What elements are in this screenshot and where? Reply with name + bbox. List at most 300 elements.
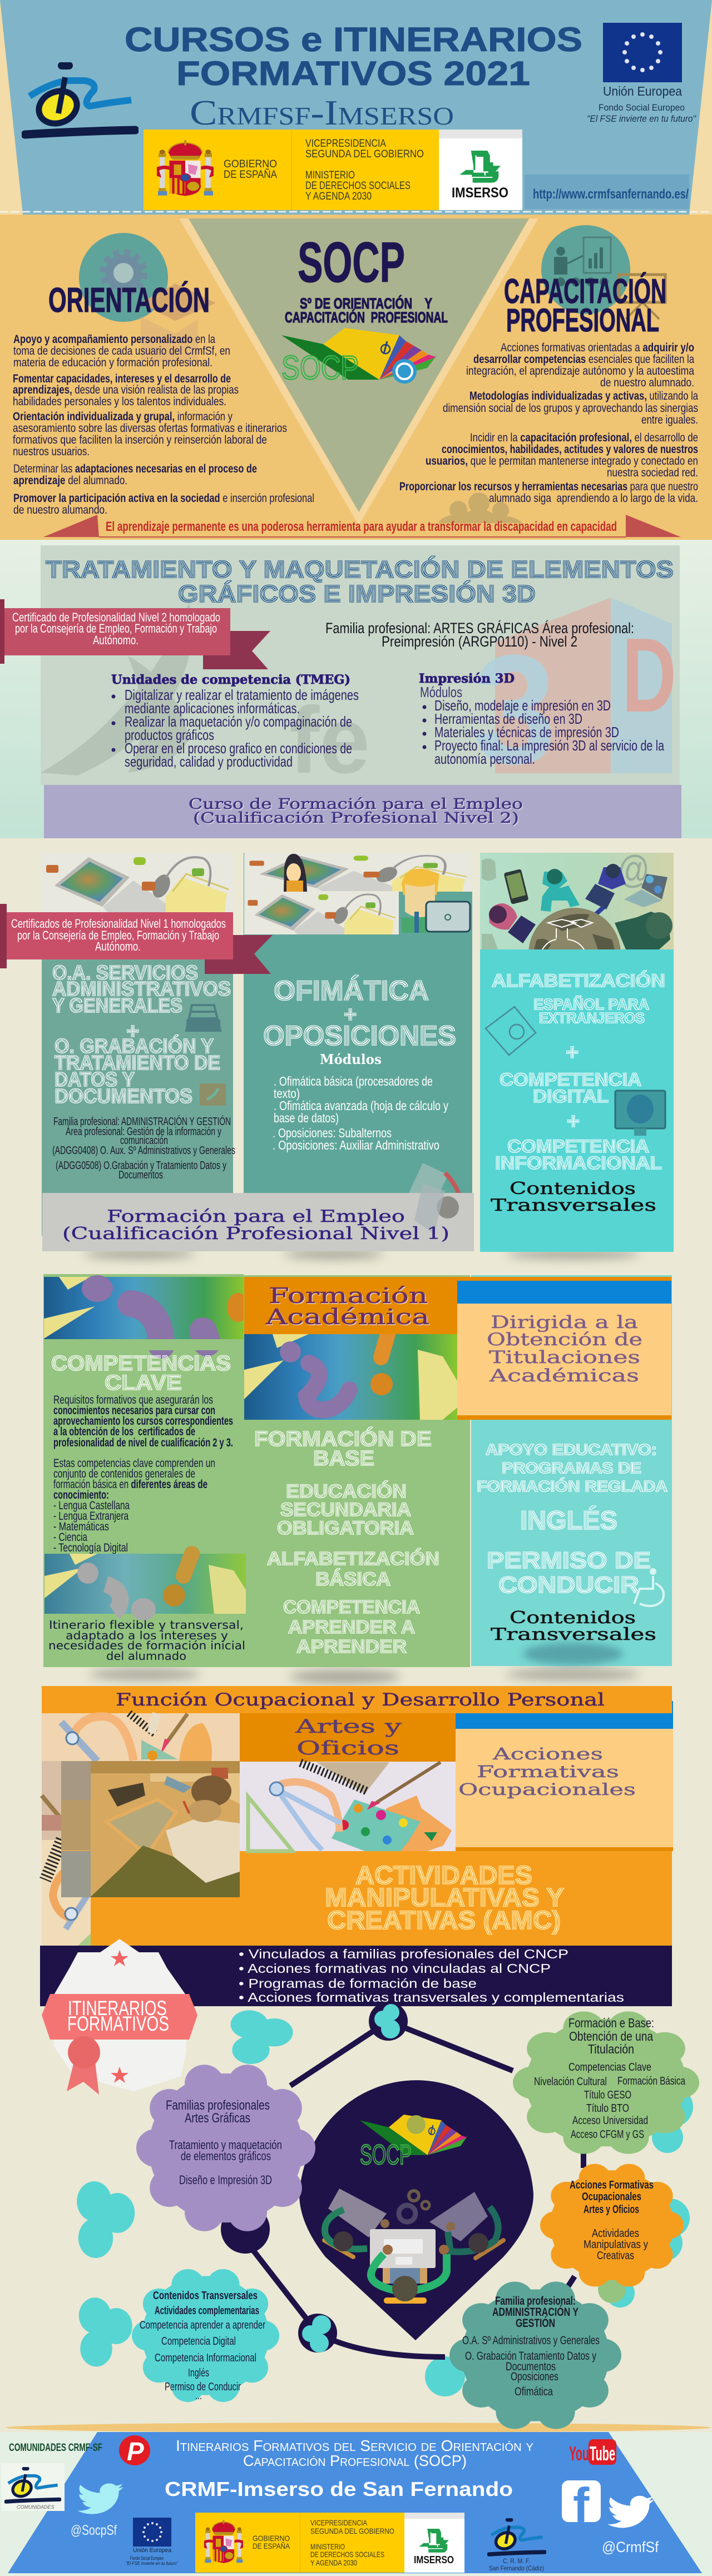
- heading: administrativos: DATOS Y: [55, 1068, 135, 1091]
- text: familia administración: Área profesional: Gestión de la información y: [66, 1125, 221, 1138]
- blob: familia administración: GESTIÓN: [516, 2316, 555, 2330]
- heading: alfabetización: COMPETENCIA: [500, 1070, 641, 1090]
- website link: [525, 175, 689, 209]
- badge: itinerarios formativos: [42, 1939, 197, 2095]
- icon: youtube: You: [569, 2442, 589, 2465]
- text: contenidos transversales: Transversales: [491, 1625, 656, 1644]
- text: familia profesional: Familia profesional: ARTES GRÁFICAS Área profesional:: [325, 620, 634, 636]
- government band small: VICEPRESIDENCIA: [310, 2518, 368, 2527]
- EU flag: "El FSE invierte en tu futuro": [587, 113, 696, 124]
- footer: [0, 2282, 712, 2576]
- text: unidades de competencia: [111, 673, 359, 770]
- government band small: [195, 2513, 464, 2573]
- heading: apoyo educativo: PROGRAMAS DE: [502, 1459, 641, 1476]
- heading: formación de base: BASE: [313, 1447, 374, 1470]
- blob: familia administración: [449, 2282, 621, 2429]
- icon: gear circle: [79, 233, 216, 361]
- government band: DE ESPAÑA: [224, 168, 277, 181]
- heading: formación de base: OBLIGATORIA: [277, 1518, 414, 1539]
- watermark: people: [438, 493, 522, 523]
- panel: itinerarios diagram: [42, 1939, 699, 2402]
- EU flag: [587, 23, 696, 124]
- government band small: SEGUNDA DEL GOBIERNO: [310, 2527, 394, 2535]
- blob: contenidos transversales: Contenidos Transversales: [153, 2290, 258, 2302]
- ribbon: certificado nivel 2: Certificado de Profesionalidad Nivel 2 homologado: [12, 610, 220, 624]
- text: orientación: [13, 333, 314, 516]
- heading bar: [42, 1686, 673, 1714]
- icon: facebook: [562, 2478, 601, 2533]
- ribbon: certificados nivel 1: por la Consejería de Empleo, Formación y Trabajo: [17, 928, 219, 942]
- heading: SOCP: Sº DE ORIENTACIÓN Y: [300, 295, 432, 312]
- student green: [615, 912, 670, 949]
- text: impresión 3D: Módulos: [420, 684, 462, 700]
- icon: book: [486, 1007, 536, 1055]
- illustration: globe and students: [480, 848, 674, 1005]
- text: @SocpSf: @SocpSf: [71, 2523, 117, 2538]
- heading: alfabetización: +: [567, 1109, 580, 1133]
- icon: wheelchair: [634, 1569, 664, 1606]
- logo: comunidades: [1, 2463, 65, 2511]
- illustration: woman: [284, 854, 307, 892]
- text: contenidos transversales: Contenidos: [510, 1179, 636, 1199]
- text: unidades de competencia: Digitalizar y realizar el tratamiento de imágenes: [125, 687, 359, 703]
- text: itinerario flexible: Itinerario flexible y transversal,: [49, 1618, 244, 1632]
- blob: contenidos transversales: [132, 2269, 279, 2402]
- text: orientación: formativos que faciliten la inserción y reinserción laboral de: [13, 434, 267, 446]
- shadows: section 3: [83, 1249, 640, 1259]
- EU flag small: Unión Europea: [133, 2547, 172, 2554]
- text: itinerario flexible: necesidades de formación inicial: [48, 1639, 245, 1652]
- heading: apoyo educativo: PERMISO DE: [487, 1547, 651, 1573]
- blob: acciones ocupacionales: Creativas: [597, 2250, 634, 2262]
- panel: lista de acciones: • Programas de formación de base: [239, 1976, 477, 1991]
- icon: drawer: [186, 1005, 220, 1031]
- text: contenidos transversales: Contenidos: [510, 1608, 636, 1628]
- text: competencias clave: - Matemáticas: [53, 1520, 109, 1533]
- footer heading: [176, 2437, 533, 2469]
- illustration: three workers: [324, 2189, 503, 2304]
- heading: formación de base: SECUNDARIA: [280, 1499, 411, 1520]
- text: competencias clave: aprovechamiento los cursos correspondientes: [53, 1415, 233, 1428]
- text: capacitación: Acciones formativas orientadas a adquirir y/o: [501, 341, 694, 354]
- blob: contenidos transversales: Competencia Informacional: [155, 2352, 256, 2364]
- image: shapes muted: [44, 1554, 246, 1620]
- heading: dirigida a la obtención: Titulaciones: [489, 1347, 640, 1367]
- ribbon: certificados nivel 1: [0, 904, 273, 974]
- column: apoyo educativo: [457, 1275, 672, 1666]
- text: contenidos transversales: Transversales: [491, 1196, 656, 1215]
- text: unidades de competencia: Unidades de competencia (TMEG): [111, 673, 350, 687]
- image: drawing tools, left: [32, 1713, 241, 1946]
- blob: acciones ocupacionales: Actividades: [592, 2227, 639, 2240]
- panel: lista de acciones: • Acciones formativas transversales y complementarias: [239, 1990, 624, 2005]
- logo: CRMF small: C. R. M. F.: [503, 2557, 530, 2565]
- text: familia administración: Familia profesional: ADMINISTRACIÓN Y GESTIÓN: [53, 1115, 231, 1128]
- blob: formación de base: Acceso CFGM y GS: [571, 2129, 644, 2141]
- banner: formación para el empleo: [42, 1184, 474, 1251]
- heading: ofimática: Módulos: [320, 1051, 382, 1067]
- text: orientación: Promover la participación activa en la sociedad e inserción profesional: [13, 492, 314, 505]
- text: competencias clave: formación básica en diferentes áreas de: [53, 1478, 207, 1491]
- government band: DE DERECHOS SOCIALES: [305, 180, 411, 192]
- blob: contenidos transversales: ...: [195, 2390, 202, 2402]
- text: capacitación: Proporcionar los recursos y herramientas necesarias para que nuestro: [399, 480, 698, 493]
- heading: dirigida a la obtención: [487, 1312, 642, 1386]
- heading: formación de base: ALFABETIZACIÓN: [267, 1548, 439, 1569]
- text: competencias clave: a la obtención de los certificados de: [53, 1425, 195, 1438]
- heading: alfabetización: +: [566, 1040, 578, 1065]
- blob: formación de base: Formación Básica: [617, 2075, 686, 2087]
- blob: artes gráficas: Familias profesionales: [166, 2098, 270, 2113]
- ribbon: certificado nivel 2: Autónomo.: [93, 633, 139, 647]
- heading: competencias clave: CLAVE: [105, 1371, 182, 1395]
- panel: SOCP intro: [0, 215, 712, 540]
- banner: formación para el empleo: Formación para el Empleo: [107, 1207, 405, 1226]
- government band: [144, 130, 522, 210]
- heading: alfabetización: INFORMACIONAL: [495, 1153, 662, 1173]
- connector lines: [245, 2021, 584, 2357]
- heading: competencias clave: [51, 1352, 231, 1395]
- heading: alfabetización: [492, 971, 665, 1173]
- blob: formación de base: Nivelación Cultural: [534, 2076, 607, 2088]
- text: unidades de competencia: Operar en el proceso grafico en condiciones de: [125, 740, 352, 757]
- icon: youtube: [569, 2439, 616, 2465]
- text: módulos ofimática: . Oposiciones: Auxiliar Administrativo: [273, 1138, 439, 1152]
- panel: función ocupacional: [32, 1686, 673, 2006]
- text: módulos ofimática: base de datos): [274, 1111, 339, 1125]
- blob: formación de base: Competencias Clave: [568, 2061, 651, 2073]
- text: orientación: de nuestro alumando.: [13, 504, 107, 516]
- icon: facebook: f: [573, 2478, 590, 2533]
- blob: acciones ocupacionales: Acciones Formativas: [570, 2179, 654, 2191]
- blob: acciones ocupacionales: Ocupacionales: [582, 2191, 641, 2203]
- heading: alfabetización: ESPAÑOL PARA: [533, 996, 649, 1013]
- watermark: floral Life: fe: [289, 688, 370, 793]
- text: módulos ofimática: texto): [274, 1086, 300, 1101]
- laptop: [641, 874, 668, 899]
- text: contenidos transversales: [491, 1179, 656, 1215]
- text: módulos ofimática: . Ofimática básica (procesadores de: [274, 1074, 433, 1088]
- blob: artes gráficas: Artes Gráficas: [185, 2111, 250, 2126]
- heading: course title: [46, 555, 674, 608]
- panel: tratamiento y maquetación: [0, 540, 712, 838]
- logo: SOCP book: [281, 328, 438, 386]
- government band: GOBIERNO: [224, 158, 277, 170]
- image: photo of student: [61, 1761, 240, 1897]
- icon: twitter SOCP: [77, 2483, 123, 2514]
- panel: lista de acciones: • Acciones formativas no vinculadas al CNCP: [239, 1961, 551, 1976]
- text: competencias clave: - Ciencia: [53, 1531, 87, 1544]
- panel: acciones formativas ocupacionales: Acciones: [492, 1744, 603, 1763]
- heading: administrativos: O. GRABACIÓN Y: [55, 1034, 214, 1057]
- text: unidades de competencia: mediante aplicaciones informáticas.: [125, 700, 300, 717]
- footer heading: Itinerarios Formativos del Servicio de Orientación y: [176, 2437, 533, 2454]
- watermark: 3D box: D: [622, 616, 676, 734]
- panel: acciones formativas ocupacionales: Formativas: [477, 1762, 619, 1781]
- heading: alfabetización: EXTRANJEROS: [539, 1009, 645, 1026]
- node: bottom: [298, 2314, 337, 2353]
- government band: IMSERSO: [452, 185, 508, 201]
- heading: competencias clave: COMPETENCIAS: [51, 1352, 231, 1375]
- title: FORMATIVOS 2021: [176, 54, 530, 92]
- heading: administrativos: TRATAMIENTO DE: [55, 1051, 220, 1074]
- heading: ofimática: OPOSICIONES: [263, 1020, 456, 1051]
- phone: [503, 869, 529, 904]
- column: competencias clave: [43, 1274, 249, 1667]
- heading: capacitación profesional: [504, 272, 666, 339]
- text: capacitación: Incidir en la capacitación profesional, el desarrollo de: [470, 431, 698, 444]
- government band: VICEPRESIDENCIA: [305, 138, 386, 150]
- blob: familia administración: ADMINISTRACIÓN Y: [492, 2305, 578, 2319]
- text: familia administración: comunicación: [120, 1135, 168, 1147]
- blob: familia administración: Familia profesional:: [495, 2295, 576, 2308]
- logo: CRMF: [25, 66, 135, 135]
- text: módulos ofimática: . Oposiciones: Subalternos: [273, 1126, 392, 1140]
- text: orientación: toma de decisiones de cada usuario del CrmfSf, en: [13, 345, 230, 357]
- text: competencias clave: - Lengua Castellana: [53, 1499, 130, 1512]
- government band: MINISTERIO: [305, 170, 355, 181]
- icon: phone: [200, 1083, 226, 1106]
- text: impresión 3D: autonomía personal.: [434, 750, 535, 767]
- ribbon: certificados nivel 1: Autónomo.: [95, 939, 141, 953]
- heading: administrativos: DOCUMENTOS: [55, 1085, 192, 1107]
- text: familia administración: (ADGG0408) O. Aux. Sº Administrativos y Generales: [52, 1145, 235, 1157]
- text: competencias clave: Estas competencias clave comprenden un: [53, 1457, 215, 1470]
- text: orientación: asesoramiento sobre las diversas ofertas formativas e itinerarios: [13, 422, 287, 435]
- blob: artes gráficas: de elementos gráficos: [181, 2149, 271, 2163]
- heading: apoyo educativo: APOYO EDUCATIVO:: [486, 1441, 657, 1458]
- text: capacitación: entre iguales.: [641, 414, 698, 426]
- text: impresión 3D: Herramientas de diseño en 3D: [434, 710, 582, 727]
- watermark: 3D box: 3: [473, 623, 556, 797]
- text: itinerario flexible: del alumnado: [106, 1649, 186, 1663]
- text: capacitación: Metodologías individualizadas y activas, utilizando la: [469, 390, 698, 402]
- blob: familia administración: Documentos: [506, 2360, 556, 2373]
- heading: orientación: ORIENTACIÓN: [48, 281, 210, 320]
- blob: contenidos transversales: Actividades complementarias: [155, 2305, 259, 2317]
- text: módulos ofimática: [273, 1074, 448, 1152]
- heading: ofimática: +: [344, 1002, 357, 1027]
- text: competencias clave: Requisitos formativos que asegurarán los: [53, 1394, 213, 1406]
- heading: course title: TRATAMIENTO Y MAQUETACIÓN DE ELEMENTOS: [46, 555, 674, 583]
- EU flag small: Fondo Social Europeo: [130, 2555, 164, 2561]
- heading bar: Función Ocupacional y Desarrollo Personal: [116, 1690, 605, 1710]
- blob: familia administración: Ofimática: [515, 2385, 553, 2398]
- icon: pinterest: [119, 2435, 150, 2466]
- blob: familia administración: O. Grabación Tratamiento Datos y: [465, 2350, 596, 2363]
- background orange block: [91, 1851, 672, 1946]
- heading: formación de base: COMPETENCIA: [283, 1597, 420, 1617]
- text: orientación: Fomentar capacidades, intereses y el desarrollo de: [13, 372, 231, 385]
- blue trapezoid: [8, 2432, 702, 2573]
- text: capacitación: [399, 341, 698, 505]
- heading: alfabetización: ALFABETIZACIÓN: [492, 971, 665, 991]
- panel: formación para el empleo: [0, 848, 674, 1252]
- logo: CRMF small: San Fernando (Cádiz): [489, 2564, 544, 2572]
- text: unidades de competencia: productos gráficos: [125, 727, 214, 743]
- ribbon: certificados nivel 1: Certificados de Profesionalidad Nivel 1 homologados: [11, 917, 226, 931]
- subtitle: Crmfsf-Imserso: [190, 93, 454, 132]
- blob: formación de base: Formación e Base:: [568, 2016, 654, 2030]
- heading: formación académica: Formación: [269, 1284, 428, 1308]
- text: familia administración: [52, 1115, 235, 1181]
- EU flag small: "El FSE invierte en tu futuro": [126, 2561, 179, 2566]
- logo: SOCP book: SOCP: [281, 349, 359, 386]
- text: impresión 3D: [419, 672, 664, 767]
- icon: twitter CRMF: [607, 2496, 654, 2528]
- heading: AMC: [325, 1861, 564, 1935]
- teal clusters: [77, 2010, 693, 2396]
- heading: alfabetización: DIGITAL: [533, 1086, 609, 1106]
- text: impresión 3D: Diseño, modelaje e impresión en 3D: [434, 697, 611, 714]
- heading: formación de base: EDUCACIÓN: [286, 1481, 407, 1502]
- banner: formación para el empleo: (Cualificación Profesional Nivel 1): [62, 1224, 449, 1244]
- blob: artes gráficas: [136, 2065, 315, 2231]
- text: orientación: aprendizaje del alumnado.: [13, 474, 127, 487]
- heading: administrativos: +: [126, 1019, 139, 1043]
- blob: artes gráficas: Tratamiento y maquetación: [169, 2138, 282, 2152]
- text: orientación: aprendizajes, desde una visión realista de las propias: [13, 384, 239, 396]
- panel: lista de acciones: • Vinculados a familias profesionales del CNCP: [239, 1947, 568, 1961]
- heading: apoyo educativo: [477, 1441, 668, 1598]
- text: orientación: nuestros usuarios.: [13, 445, 90, 458]
- ribbon: certificado nivel 2: por la Consejería de Empleo, Formación y Trabajo: [15, 621, 217, 635]
- heading: formación académica: Académica: [265, 1305, 429, 1329]
- government band small: GOBIERNO: [253, 2534, 290, 2543]
- heading: administrativos: [52, 961, 231, 1107]
- government band: Y AGENDA 2030: [305, 191, 372, 202]
- student teal: [541, 885, 580, 912]
- icon: pinterest: P: [127, 2437, 144, 2466]
- blob: contenidos transversales: Inglés: [188, 2367, 209, 2379]
- text: competencias clave: - Tecnología Digital: [53, 1541, 128, 1554]
- text: orientación: Orientación individualizada y grupal, información y: [13, 410, 233, 423]
- logo: SOCP book in pin: [360, 2115, 468, 2170]
- heading: formación académica: [265, 1284, 429, 1329]
- student pink with tablet: [508, 916, 536, 943]
- heading: administrativos: ADMINISTRATIVOS: [52, 977, 231, 1000]
- government band small: DE DERECHOS SOCIALES: [310, 2550, 384, 2559]
- text: competencias clave: conjunto de contenidos generales de: [53, 1468, 195, 1480]
- blob: acciones ocupacionales: Artes y Oficios: [584, 2204, 639, 2216]
- heading: artes y oficios: Oficios: [296, 1737, 399, 1759]
- blob: formación de base: Título GESO: [584, 2089, 631, 2101]
- illustration: worker from above: [409, 1163, 461, 1223]
- text: capacitación: de nuestro alumnado.: [600, 376, 694, 389]
- heading: CRMF: CRMF-Imserso de San Fernando: [165, 2478, 513, 2500]
- heading: AMC: CREATIVAS (AMC): [327, 1906, 561, 1935]
- text: orientación: Determinar las adaptaciones necesarias en el proceso de: [13, 463, 257, 475]
- column: ofimática: [244, 853, 472, 1194]
- heading: AMC: ACTIVIDADES: [355, 1861, 532, 1889]
- text: impresión 3D: Impresión 3D: [419, 672, 515, 686]
- logo: SOCP book in pin: SOCP: [360, 2139, 412, 2170]
- text: itinerario flexible: adaptado a los intereses y: [66, 1629, 228, 1642]
- blob: formación de base: Titulación: [588, 2042, 634, 2056]
- text: competencias clave: profesionalidad de nivel de cualificación 2 y 3.: [53, 1436, 233, 1449]
- heading: administrativos: O.A. SERVICIOS: [52, 961, 198, 984]
- text: @CrmfSf: @CrmfSf: [602, 2539, 659, 2555]
- heading: artes y oficios: Artes y: [294, 1715, 402, 1738]
- government band small: DE ESPAÑA: [253, 2542, 290, 2550]
- heading: alfabetización: COMPETENCIA: [507, 1136, 649, 1156]
- text: unidades de competencia: Realizar la maquetación y/o compaginación de: [125, 713, 352, 730]
- watermark: floral Life: [41, 603, 370, 793]
- logo: comunidades: COMUNIDADES: [17, 2504, 55, 2510]
- EU flag: Fondo Social Europeo: [599, 102, 685, 113]
- text: familia administración: Documentos: [118, 1169, 163, 1181]
- heading: formación de base: APRENDER: [296, 1636, 407, 1657]
- heading: formación de base: APRENDER A: [288, 1617, 415, 1637]
- logo: CRMF small: [489, 2520, 545, 2572]
- blob: contenidos transversales: Permiso de Conducir: [165, 2381, 241, 2393]
- heading: ofimática: [263, 975, 456, 1067]
- icon: monitor: [615, 1091, 665, 1136]
- shadows: section 4: [89, 1669, 640, 1683]
- heading: dirigida a la obtención: Dirigida a la: [491, 1312, 638, 1332]
- blob: formación de base: Título BTO: [586, 2102, 629, 2115]
- blob: acciones ocupacionales: [540, 2164, 684, 2286]
- footer heading: Capacitación Profesional (SOCP): [243, 2452, 467, 2469]
- column: transversales: [480, 848, 674, 1252]
- image: shapes top: [44, 1275, 249, 1350]
- blob: contenidos transversales: Competencia aprender a aprender: [140, 2319, 265, 2331]
- heading: ofimática: OFIMÁTICA: [274, 975, 429, 1006]
- panel: lista de acciones: [40, 1946, 672, 2006]
- government band small: Y AGENDA 2030: [310, 2558, 357, 2567]
- heading: course title: GRÁFICOS E IMPRESIÓN 3D: [178, 580, 536, 608]
- header band: [0, 0, 712, 218]
- text: impresión 3D: Materiales y técnicas de impresión 3D: [434, 724, 619, 740]
- illustration: man with laptop: [402, 869, 470, 933]
- blob: contenidos transversales: Competencia Digital: [161, 2335, 236, 2348]
- blob: familia administración: O.A. Sº Administrativos y Generales: [462, 2334, 600, 2347]
- text: contenidos transversales: [491, 1608, 656, 1644]
- text: competencias clave: conocimiento:: [53, 1489, 109, 1501]
- badge: itinerarios formativos: ITINERARIOS: [68, 1997, 167, 2020]
- blob: formación de base: Obtención de una: [569, 2029, 653, 2043]
- text: orientación: habilidades personales y los talentos individuales.: [13, 395, 226, 408]
- panel: acciones formativas ocupacionales: Ocupacionales: [458, 1780, 636, 1799]
- government band small: MINISTERIO: [310, 2542, 345, 2551]
- illustration: globe and students: @: [617, 848, 650, 891]
- heading: apoyo educativo: CONDUCIR: [498, 1572, 639, 1598]
- blob: formación de base: Acceso Universidad: [572, 2115, 648, 2127]
- banner: curso formación empleo: (Cualificación Profesional Nivel 2): [193, 810, 519, 827]
- heading: SOCP: [285, 231, 448, 326]
- government band: SEGUNDA DEL GOBIERNO: [305, 148, 424, 160]
- ribbon: certificado nivel 2: [0, 599, 270, 669]
- title: [125, 21, 582, 92]
- heading: formación de base: BÁSICA: [315, 1569, 390, 1590]
- location pin: [299, 2080, 533, 2340]
- icon: presenter circle: [541, 225, 665, 319]
- text: familia profesional: Preimpresión (ARGP0110) - Nivel 2: [382, 633, 577, 650]
- title: CURSOS e ITINERARIOS: [125, 21, 582, 58]
- heading: SOCP: SOCP: [298, 231, 405, 294]
- text: unidades de competencia: seguridad, calidad y productividad: [125, 753, 293, 770]
- heading: SOCP: CAPACITACIÓN PROFESIONAL: [285, 309, 448, 326]
- globe: [528, 908, 621, 1000]
- heading: formación de base: [254, 1426, 439, 1657]
- heading: dirigida a la obtención: Obtención de: [487, 1330, 642, 1350]
- blob: artes gráficas: Diseño e Impresión 3D: [179, 2173, 272, 2187]
- blob: formación de base: [513, 2011, 699, 2154]
- text: familia administración: (ADGG0508) O.Grabación y Tratamiento Datos y: [56, 1160, 226, 1172]
- label: comunidades: COMUNIDADES CRMF-SF: [9, 2442, 102, 2454]
- heading: administrativos: Y GENERALES: [52, 994, 182, 1017]
- badge: itinerarios formativos: FORMATIVOS: [67, 2012, 169, 2035]
